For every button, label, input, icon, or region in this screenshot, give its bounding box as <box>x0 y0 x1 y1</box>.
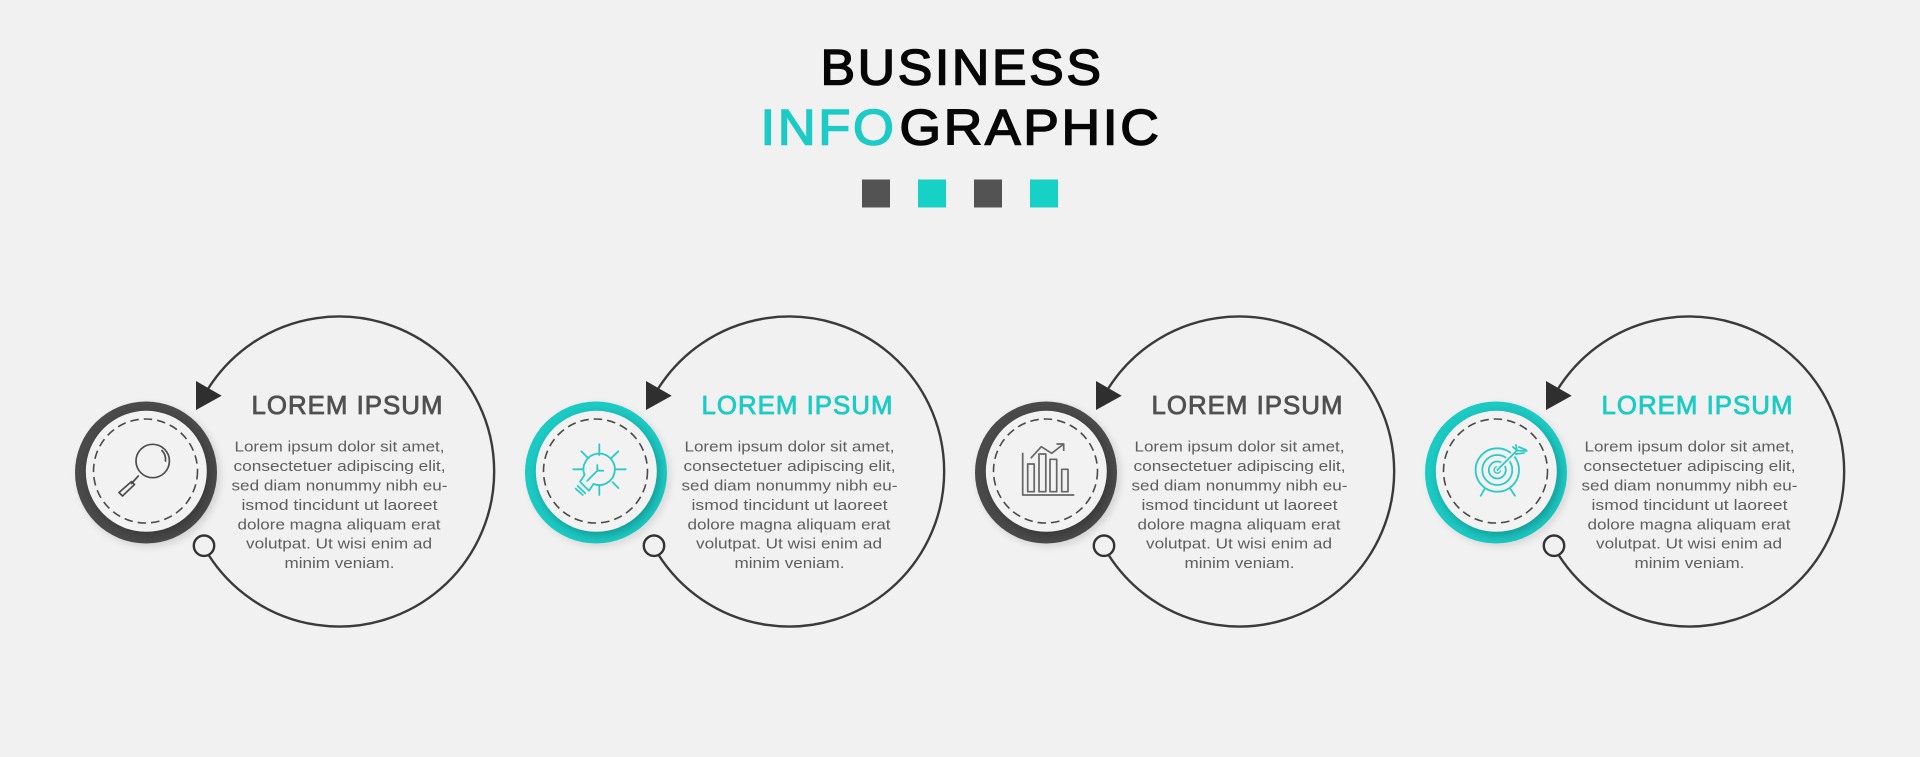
ring badge <box>525 402 670 546</box>
body text: minim veniam. <box>1184 556 1294 572</box>
body text <box>682 440 898 572</box>
infographic canvas <box>75 48 1846 628</box>
body text: Lorem ipsum dolor sit amet, <box>1584 440 1794 456</box>
title <box>760 40 1162 156</box>
body text: sed diam nonummy nibh eu- <box>1582 478 1798 494</box>
body text: minim veniam. <box>284 556 394 572</box>
body text: Lorem ipsum dolor sit amet, <box>684 440 894 456</box>
body text <box>1582 440 1798 572</box>
panel: step 3 <box>975 316 1394 626</box>
body text: sed diam nonummy nibh eu- <box>1132 478 1348 494</box>
body text: volutpat. Ut wisi enim ad <box>696 537 882 553</box>
ring badge <box>1425 402 1570 546</box>
arrowhead <box>196 381 222 410</box>
body text: consectetuer adipiscing elit, <box>684 459 896 475</box>
body text: sed diam nonummy nibh eu- <box>232 478 448 494</box>
body text: Lorem ipsum dolor sit amet, <box>234 440 444 456</box>
body text: ismod tincidunt ut laoreet <box>242 498 438 514</box>
icon: magnifying glass <box>119 444 169 496</box>
body text: volutpat. Ut wisi enim ad <box>1146 537 1332 553</box>
end knob <box>644 536 664 556</box>
body text: consectetuer adipiscing elit, <box>234 459 446 475</box>
body text: ismod tincidunt ut laoreet <box>1142 498 1338 514</box>
panel: step 1 <box>75 316 494 626</box>
body text <box>232 440 448 572</box>
heading: LOREM IPSUM <box>1602 392 1794 420</box>
arrow loop <box>208 316 494 626</box>
icon: target with arrow <box>1476 445 1527 496</box>
body text: volutpat. Ut wisi enim ad <box>1596 537 1782 553</box>
icon: bar chart <box>1023 444 1074 495</box>
arrow loop <box>1558 316 1844 626</box>
body text: Lorem ipsum dolor sit amet, <box>1134 440 1344 456</box>
body text: minim veniam. <box>1634 556 1744 572</box>
title: INFO <box>760 100 896 156</box>
panel: step 4 <box>1425 316 1844 626</box>
heading: LOREM IPSUM <box>252 392 444 420</box>
panel: step 2 <box>525 316 944 626</box>
end knob <box>1544 536 1564 556</box>
arrowhead <box>646 381 672 410</box>
body text: ismod tincidunt ut laoreet <box>692 498 888 514</box>
title squares <box>862 180 1058 208</box>
body text: sed diam nonummy nibh eu- <box>682 478 898 494</box>
body text: dolore magna aliquam erat <box>1138 517 1340 533</box>
ring badge <box>75 402 220 546</box>
heading: LOREM IPSUM <box>702 392 894 420</box>
arrowhead <box>1546 381 1572 410</box>
arrow loop <box>1108 316 1394 626</box>
body text: ismod tincidunt ut laoreet <box>1592 498 1788 514</box>
body text: volutpat. Ut wisi enim ad <box>246 537 432 553</box>
end knob <box>1094 536 1114 556</box>
end knob <box>194 536 214 556</box>
icon: light bulb <box>573 444 626 495</box>
body text <box>1132 440 1348 572</box>
arrow loop <box>658 316 944 626</box>
body text: consectetuer adipiscing elit, <box>1134 459 1346 475</box>
body text: dolore magna aliquam erat <box>1588 517 1790 533</box>
body text: dolore magna aliquam erat <box>688 517 890 533</box>
ring badge <box>975 402 1120 546</box>
body text: minim veniam. <box>734 556 844 572</box>
body text: consectetuer adipiscing elit, <box>1584 459 1796 475</box>
heading: LOREM IPSUM <box>1152 392 1344 420</box>
arrowhead <box>1096 381 1122 410</box>
title: BUSINESS <box>820 40 1104 96</box>
title: GRAPHIC <box>900 100 1162 156</box>
body text: dolore magna aliquam erat <box>238 517 440 533</box>
